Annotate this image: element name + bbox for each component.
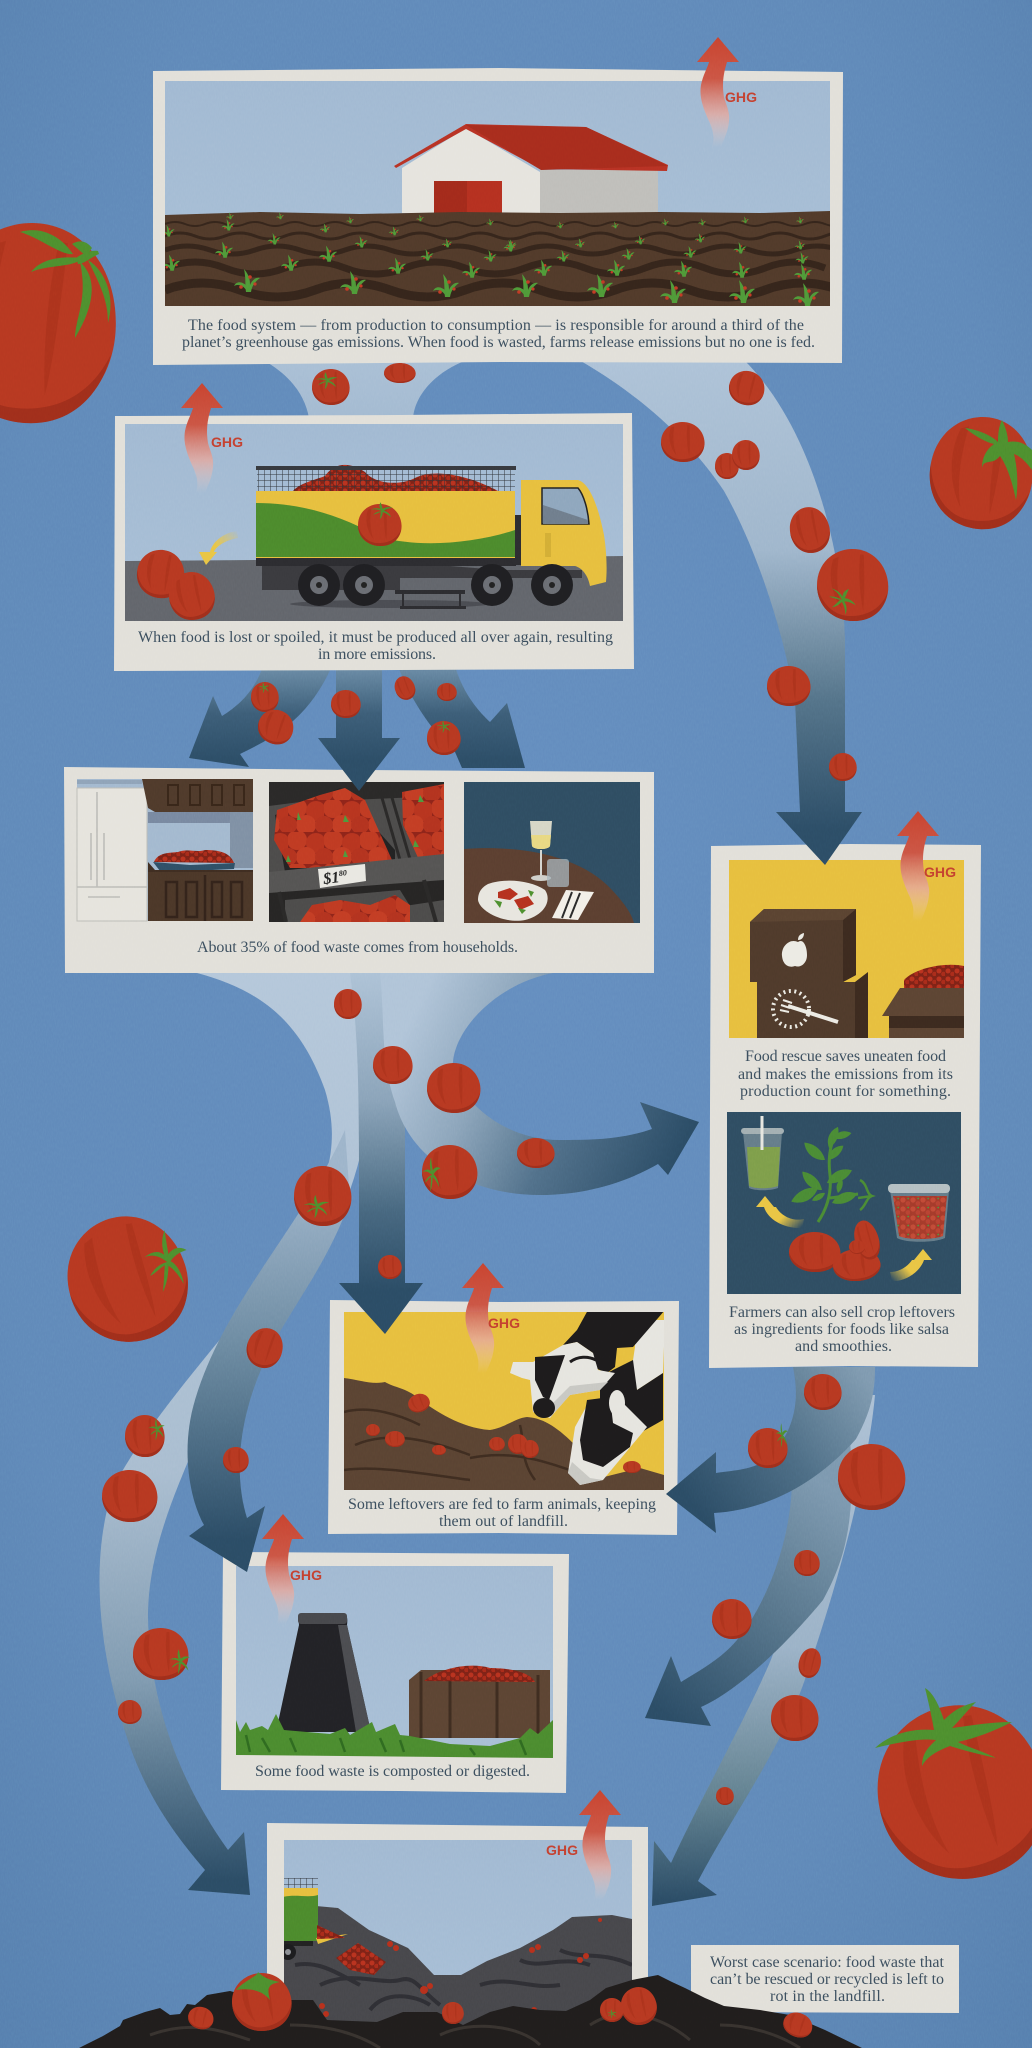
landfill scene [284, 1840, 632, 2025]
GHG arrow: transport [181, 383, 243, 493]
caption [138, 629, 613, 663]
tomato [794, 1550, 820, 1576]
tomato [378, 1255, 402, 1279]
price tag: $1 [322, 869, 340, 888]
caption: planet’s greenhouse gas emissions. When food is wasted, farms release emissions but no one is fed. [182, 334, 815, 351]
tomato [661, 422, 705, 462]
soil rows [165, 211, 855, 306]
GHG arrow: compost: GHG [290, 1567, 322, 1583]
tomato [817, 549, 888, 621]
food rescue scene [729, 860, 964, 1038]
GHG arrow: farm animals [462, 1263, 520, 1373]
tomato [251, 682, 279, 712]
caption: food rescue [738, 1048, 953, 1100]
callout: worst case scenario: Worst case scenario: food waste that [710, 1954, 945, 1971]
caption: food rescue: and makes the emissions from its [738, 1066, 953, 1083]
kitchen scene [77, 779, 253, 921]
caption: Some food waste is composted or digested. [255, 1763, 530, 1780]
arrow: rescue to landfill [652, 1395, 875, 1906]
GHG arrow: farm [697, 37, 757, 147]
arrow: transport to restaurants [398, 666, 525, 768]
landfill pile foreground [79, 1969, 862, 2048]
panel: landfill [267, 1823, 648, 2025]
tomato [223, 1447, 249, 1473]
arrow: transport to shops [318, 666, 400, 791]
price tag: 80 [338, 868, 347, 878]
tomato [118, 1700, 142, 1724]
large tomato: lower right [862, 1688, 1032, 1895]
leftover tomatoes [789, 1218, 884, 1283]
tomato [373, 1046, 413, 1084]
tomato [312, 369, 350, 405]
tomato [437, 683, 457, 701]
compost scene [236, 1566, 553, 1758]
icon: salsa jar [888, 1184, 950, 1242]
panel: food rescue and crop leftovers [709, 844, 981, 1368]
tomato [838, 1444, 905, 1510]
fallen tomatoes [133, 546, 218, 624]
tomato [786, 504, 833, 556]
panel: households, shops and restaurants [64, 767, 654, 973]
restaurant table scene [464, 782, 640, 923]
tomato [780, 2009, 816, 2041]
panel: compost and digestion [221, 1552, 569, 1793]
tomato [771, 1695, 819, 1741]
tomato [228, 1969, 295, 2035]
icon: cows [510, 1310, 665, 1485]
arrow: transport to households [189, 666, 332, 767]
tomato [716, 1787, 734, 1805]
crop leftovers scene [727, 1112, 961, 1294]
arrow: consumers to farm animals [339, 973, 425, 1334]
GHG arrow: compost [262, 1514, 322, 1624]
tomatoes in the feed [366, 1391, 641, 1473]
caption: them out of landfill. [439, 1513, 568, 1530]
GHG arrow: food rescue [897, 811, 956, 921]
tomato [422, 1145, 477, 1199]
arrow: consumers to landfill [100, 973, 400, 1895]
panel: transport [114, 413, 634, 671]
arrow: farm to transport funnel [263, 360, 467, 418]
tomato [517, 1138, 555, 1168]
tomato [442, 2002, 464, 2024]
large tomato: lower left [54, 1203, 201, 1355]
caption: Some leftovers are fed to farm animals, keeping [348, 1496, 656, 1513]
caption [182, 317, 815, 351]
tomato [334, 989, 362, 1019]
icon: apple [782, 933, 807, 967]
tomato [384, 363, 416, 383]
caption: crop leftovers [729, 1304, 955, 1355]
tomato [294, 1166, 351, 1226]
caption: crop leftovers: and smoothies. [795, 1338, 892, 1355]
caption: food rescue: production count for something. [740, 1083, 951, 1100]
tomato [186, 2004, 216, 2032]
GHG arrow: landfill [546, 1790, 621, 1900]
GHG arrow: transport: GHG [211, 434, 243, 450]
icon: fork burst [773, 991, 838, 1027]
caption: food rescue: Food rescue saves uneaten food [745, 1048, 946, 1065]
large tomato: left [0, 212, 129, 434]
market crates scene [269, 782, 444, 922]
red food waste specks [319, 1918, 602, 2017]
tomato [241, 1323, 288, 1373]
tomato [133, 1628, 190, 1680]
tomato [618, 1984, 660, 2028]
caption: in more emissions. [318, 646, 436, 663]
tomato [767, 666, 811, 706]
tomato [125, 1415, 165, 1457]
arrow: consumers to food rescue [380, 973, 699, 1195]
callout: worst case scenario: rot in the landfill. [770, 1988, 885, 2005]
tomato [427, 1063, 480, 1113]
tomato [102, 1470, 157, 1522]
caption: crop leftovers: Farmers can also sell crop leftovers [729, 1304, 955, 1321]
icon: barn [394, 124, 668, 213]
icon: tomato plant [789, 1125, 872, 1222]
caption: The food system — from production to consumption — is responsible for around a third of the [188, 317, 804, 334]
icon: smoothie cup [741, 1116, 784, 1190]
icon: truck [256, 465, 607, 609]
tomato [732, 440, 760, 470]
price tag [318, 864, 366, 888]
tomato seedlings [162, 212, 819, 306]
icon: dump truck [280, 1878, 348, 1960]
tomato [331, 690, 361, 718]
arrow: farm to food rescue [579, 360, 862, 865]
tomato [725, 367, 768, 409]
panel: farm animal feed [328, 1300, 679, 1535]
arrow: consumers to compost [188, 1130, 350, 1572]
icon: arrow to cup [756, 1196, 804, 1228]
caption: When food is lost or spoiled, it must be produced all over again, resulting [138, 629, 613, 646]
callout: worst case scenario [691, 1945, 959, 2013]
cow scene [344, 1310, 665, 1490]
tomato logo [358, 502, 402, 546]
caption: crop leftovers: as ingredients for foods like salsa [734, 1321, 949, 1338]
tomato [600, 1998, 624, 2022]
arrow: rescue to compost [645, 1440, 852, 1726]
panel: farm [153, 68, 855, 365]
tomato [712, 1599, 752, 1639]
tomato [829, 753, 857, 781]
GHG arrow: food rescue: GHG [924, 864, 956, 880]
truck scene [125, 424, 623, 624]
caption [348, 1496, 656, 1530]
GHG arrow: landfill: GHG [546, 1842, 578, 1858]
icon: yellow falling arrow [199, 531, 238, 565]
tomato [795, 1646, 824, 1680]
tomato [748, 1423, 788, 1468]
icon: arrow to jar [890, 1249, 932, 1281]
tomato [427, 721, 461, 755]
large tomato: right [921, 409, 1032, 537]
tomato [391, 673, 418, 703]
caption: About 35% of food waste comes from households. [197, 939, 518, 956]
tomato [253, 705, 298, 749]
GHG arrow: farm: GHG [725, 89, 757, 105]
callout: worst case scenario: can’t be rescued or recycled is left to [710, 1971, 944, 1988]
tomato [804, 1374, 842, 1410]
farm scene [162, 81, 855, 306]
tomato [715, 453, 739, 479]
arrow: rescue to farm animals [666, 1367, 875, 1533]
GHG arrow: farm animals: GHG [488, 1315, 520, 1331]
